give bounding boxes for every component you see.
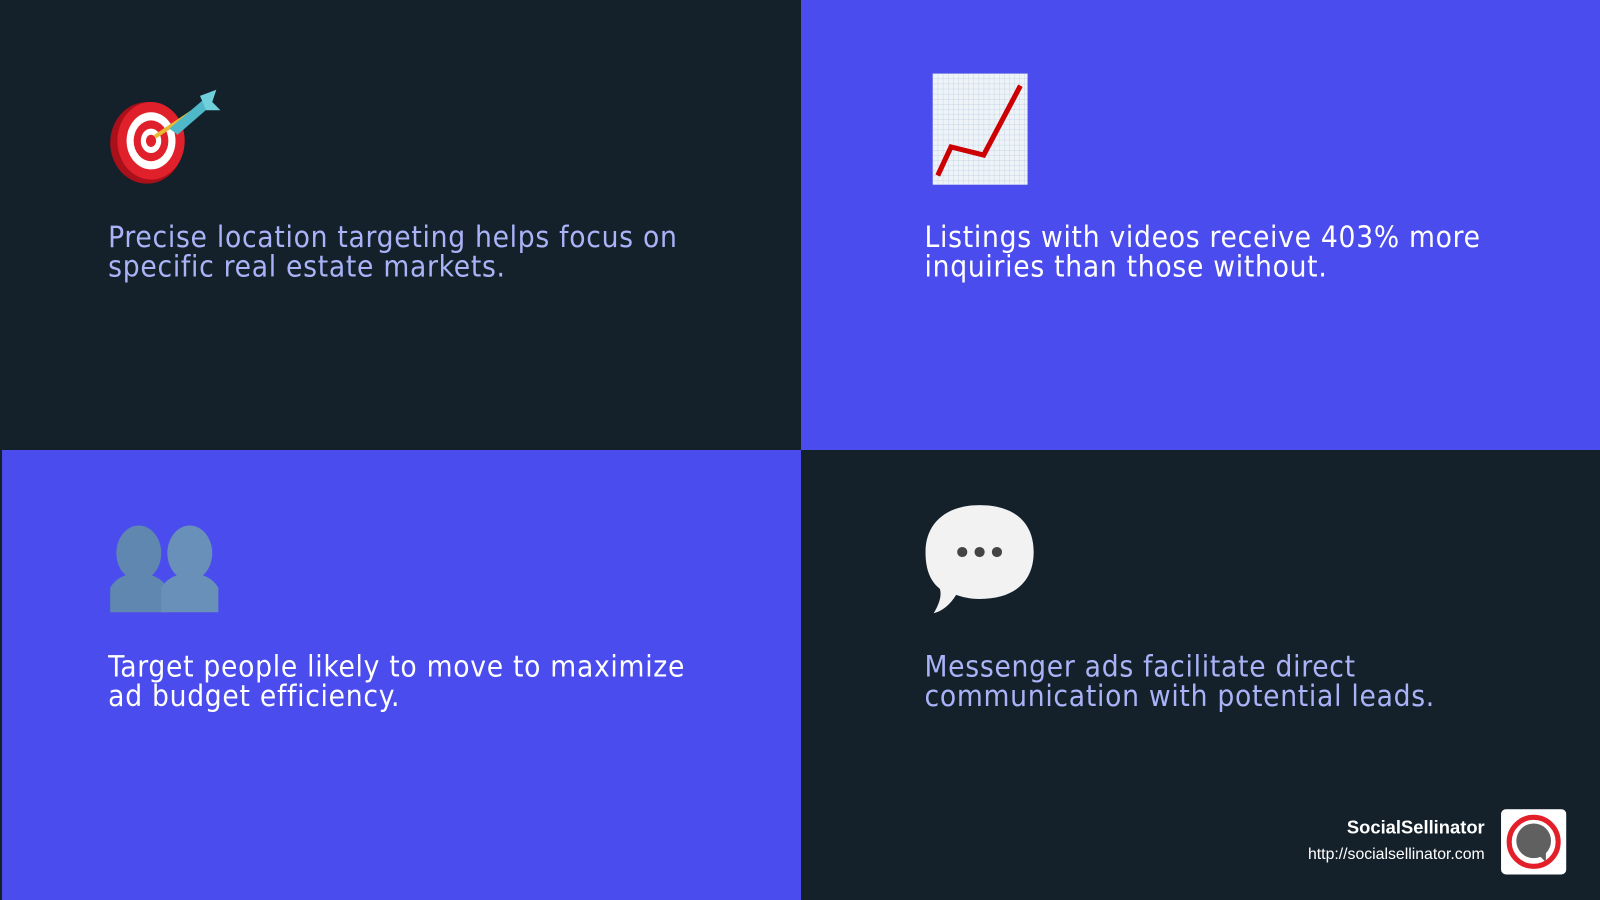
icon: speech bubble — [926, 505, 1034, 614]
brand name: SocialSellinator — [1347, 817, 1485, 838]
text: video listings: Listings with videos receive 403% more inquiries than those without. — [924, 219, 1481, 284]
text: location targeting: Precise location targeting helps focus on specific real estate markets. — [108, 219, 678, 284]
panel: location targeting — [0, 0, 801, 450]
panel: messenger ads — [801, 450, 1600, 900]
brand: SocialSellinator — [1308, 809, 1566, 874]
logo — [1501, 809, 1566, 874]
icon: chart increasing — [932, 74, 1028, 185]
panel: video listings — [801, 0, 1600, 450]
panel: people likely to move — [0, 450, 801, 900]
text: messenger ads: Messenger ads facilitate direct communication with potential leads. — [924, 649, 1435, 713]
text: people likely to move: Target people likely to move to maximize ad budget efficiency. — [108, 649, 685, 713]
icon: busts in silhouette — [110, 526, 218, 612]
brand url: http://socialsellinator.com — [1308, 846, 1485, 863]
icon: dart target — [110, 90, 220, 184]
